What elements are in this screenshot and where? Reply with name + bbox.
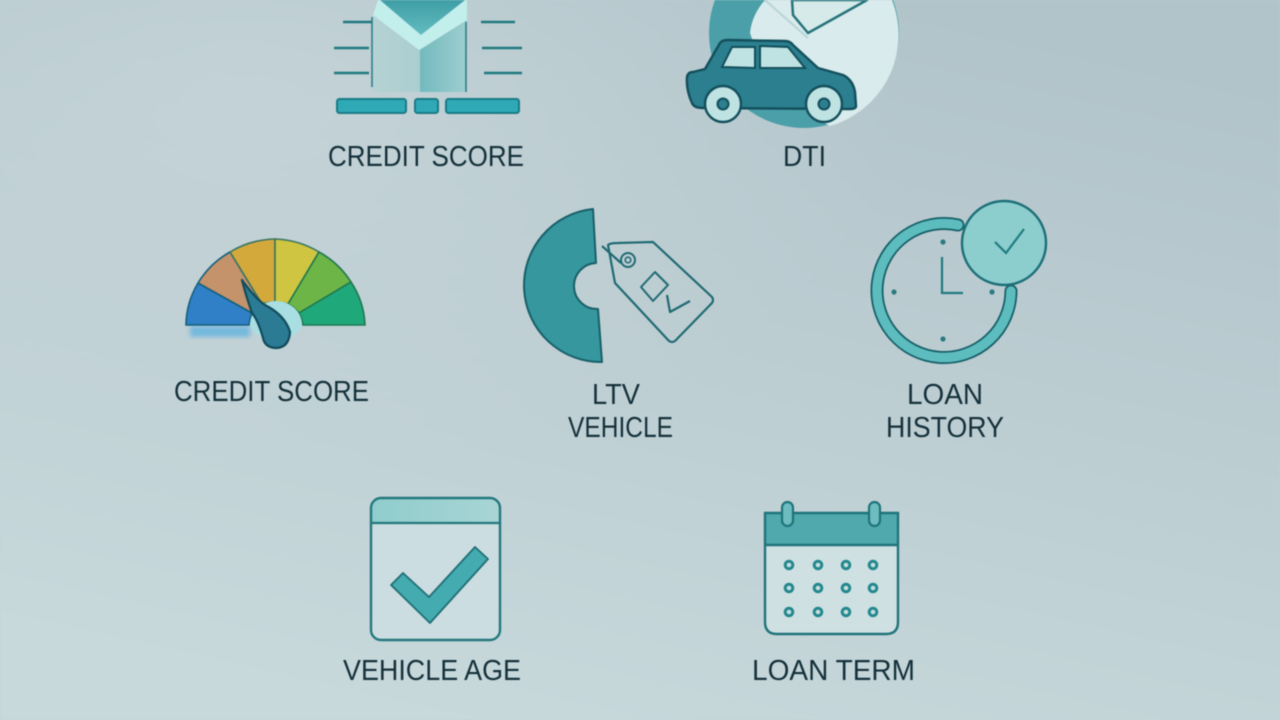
- icon: window with check: [371, 498, 500, 640]
- label: credit score: CREDIT SCORE: [328, 141, 524, 173]
- item: credit score gauge: [174, 239, 369, 408]
- icon: car: [687, 40, 856, 122]
- icon: check badge: [962, 201, 1046, 285]
- label: LTV vehicle: VEHICLE: [568, 412, 673, 444]
- icon: calendar: [765, 502, 898, 634]
- item: loan history: [877, 201, 1046, 444]
- icon: price tag: [602, 242, 713, 342]
- label: loan history: HISTORY: [886, 412, 1004, 444]
- label: loan history: [886, 379, 1004, 444]
- icon: pie chart with car: [687, 0, 899, 128]
- item: vehicle age: [343, 498, 521, 687]
- item: loan term: [752, 502, 915, 687]
- item: LTV vehicle: [524, 209, 713, 444]
- label: DTI: DTI: [783, 141, 826, 173]
- label: LTV vehicle: [568, 379, 673, 444]
- icon: clock ring: [877, 224, 1011, 358]
- label: vehicle age: VEHICLE AGE: [343, 655, 521, 687]
- label: credit score: CREDIT SCORE: [174, 376, 369, 408]
- item: credit score shield: [328, 0, 524, 173]
- item: DTI: [687, 0, 899, 173]
- icon: partial circle: [524, 209, 602, 362]
- icon: shield and open book: [334, 0, 522, 113]
- icon: gauge: [186, 239, 365, 348]
- label: LTV vehicle: LTV: [592, 379, 641, 411]
- label: loan term: LOAN TERM: [752, 655, 915, 687]
- label: loan history: LOAN: [907, 379, 983, 411]
